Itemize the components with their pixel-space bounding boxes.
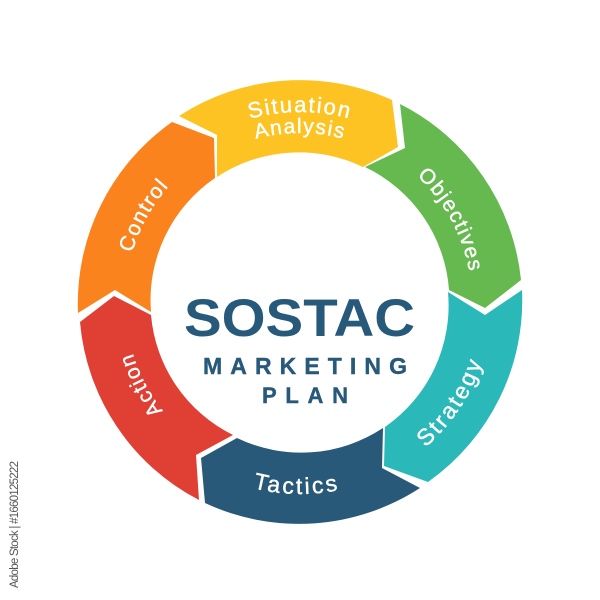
stock id side text: Adobe Stock | #1660125222 <box>9 461 21 588</box>
label: Situation Analysis <box>248 96 350 139</box>
label: Situation Analysis: Analysis <box>256 118 344 139</box>
subheading: Plan: PLAN <box>262 383 348 408</box>
label: Situation Analysis: Situation <box>248 96 350 118</box>
segment: Control <box>78 122 215 313</box>
label: Action: Action <box>123 354 164 415</box>
label: Objectives: Objectives <box>420 168 480 270</box>
label: Tactics: Tactics <box>256 472 337 494</box>
label: Strategy: Strategy <box>417 358 484 446</box>
label: Control: Control <box>120 178 168 250</box>
segment: Strategy <box>384 290 522 482</box>
heading: SOSTAC: SOSTAC <box>184 289 415 348</box>
segment: Objectives <box>365 104 521 308</box>
segment: Situation Analysis <box>179 80 398 177</box>
segment: Tactics <box>201 428 420 524</box>
subheading: Marketing: MARKETING <box>203 353 407 379</box>
segment: Action <box>80 296 233 500</box>
center title <box>184 289 415 408</box>
